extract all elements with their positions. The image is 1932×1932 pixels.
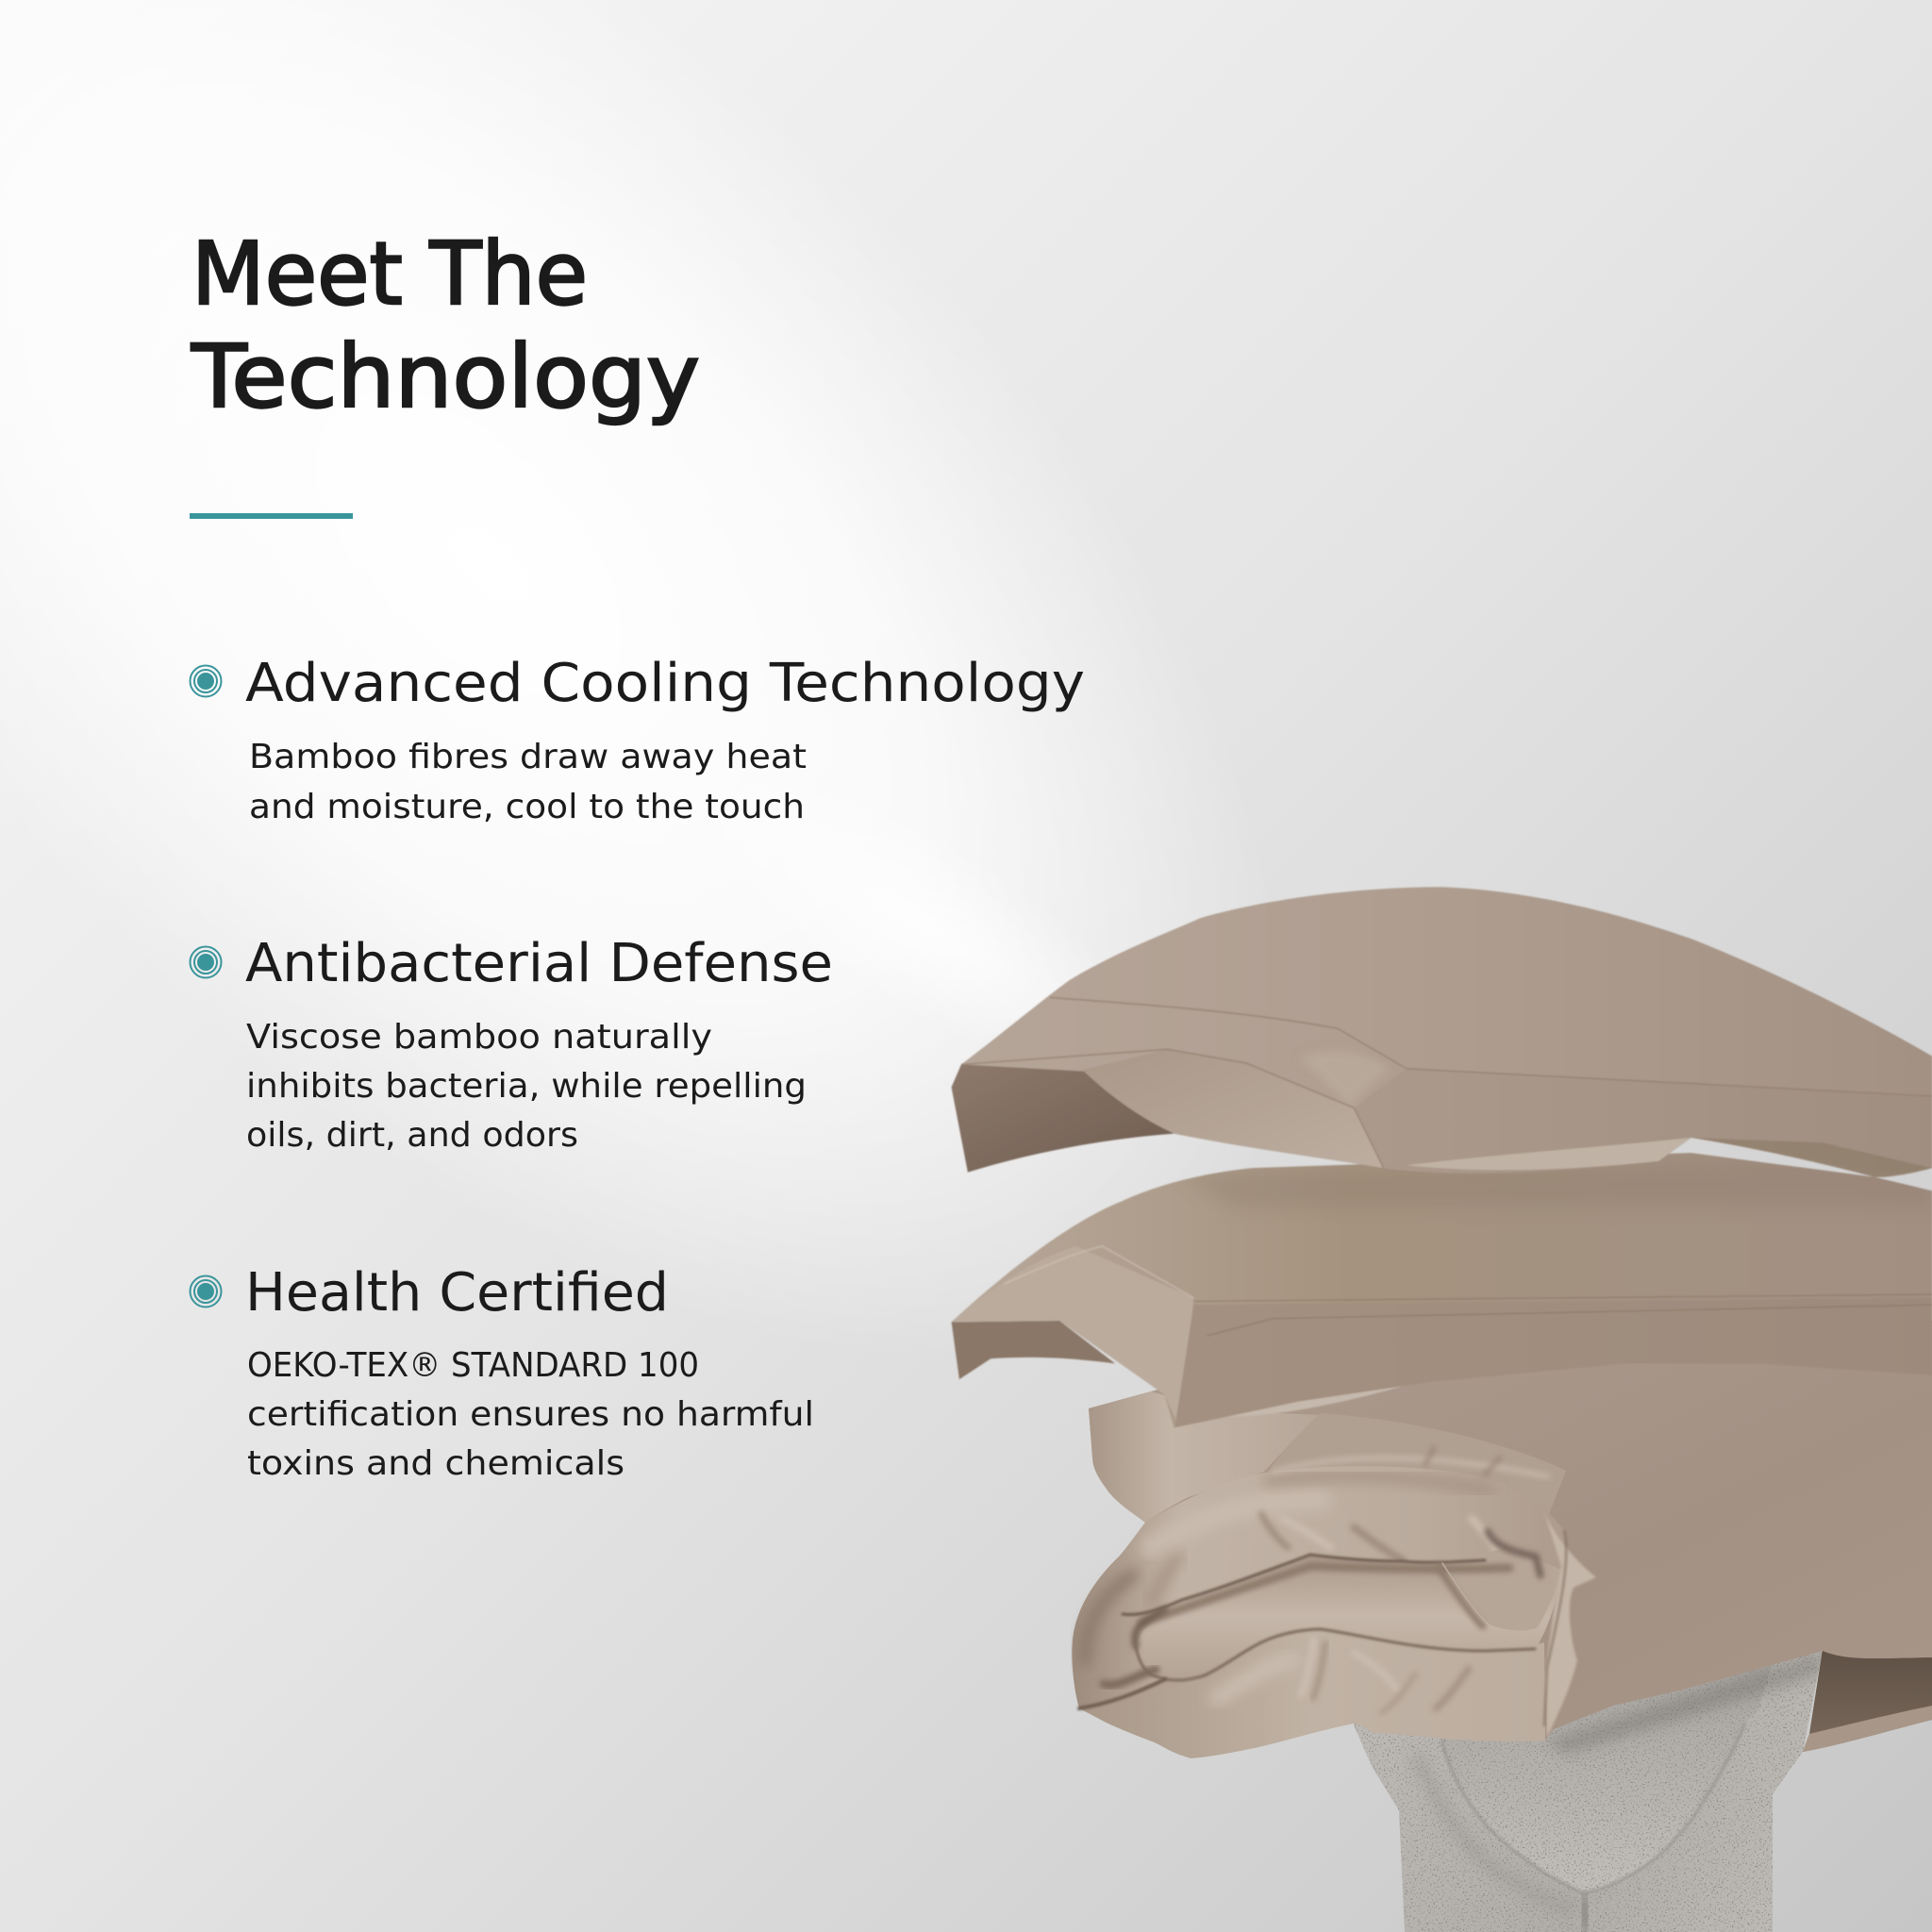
upper pillow inner lip: [1407, 1138, 1691, 1170]
feature: advanced cooling technology: [191, 653, 1085, 826]
icon: teal target bullet: [191, 1275, 221, 1307]
heading: Antibacterial Defense: [245, 933, 833, 994]
duvet ruffled edge: [1264, 1413, 1566, 1519]
description: [249, 738, 807, 826]
feature: health certified: [191, 1262, 814, 1483]
title: Technology: [191, 326, 700, 427]
description: Bamboo fibres draw away heat: [249, 738, 807, 776]
description: [246, 1018, 807, 1155]
accent rule: [190, 513, 353, 519]
description: Viscose bamboo naturally: [246, 1018, 712, 1057]
upper pillow front band: [1354, 1069, 1932, 1180]
upper pillow body: [952, 887, 1932, 1177]
stacked pillows: [945, 887, 1932, 1433]
upper pillow hem stitching: [961, 997, 1932, 1168]
description: inhibits bacteria, while repelling: [246, 1067, 807, 1106]
upper pillow pocket: [1082, 1049, 1387, 1174]
upper pillow shading details: [945, 1049, 1932, 1180]
bust speckle texture: [1349, 1651, 1830, 1932]
duvet roll soft shading: [1085, 1476, 1500, 1660]
neck shading: [1583, 1896, 1587, 1932]
fold highlight: [1313, 1057, 1381, 1098]
upper pillow dark inner flap: [945, 1064, 1175, 1174]
duvet upper roll: [1072, 1466, 1566, 1709]
title: [191, 224, 700, 427]
heading: Advanced Cooling Technology: [245, 653, 1085, 714]
heading: Health Certified: [245, 1262, 669, 1324]
description: toxins and chemicals: [247, 1444, 625, 1483]
stone bust: [1349, 1651, 1830, 1932]
description: OEKO-TEX® STANDARD 100: [247, 1346, 699, 1385]
bust jaw line: [1441, 1724, 1745, 1893]
icon: teal target bullet: [191, 947, 221, 977]
duvet pocket at right of middle fold: [1442, 1547, 1561, 1630]
upper pillow right dark wedge: [1691, 1138, 1932, 1179]
description: certification ensures no harmful: [247, 1395, 814, 1434]
title: Meet The: [192, 224, 588, 325]
upper pillow: [945, 887, 1932, 1180]
duvet dark underside: [1803, 1649, 1932, 1752]
duvet creases: [1079, 1448, 1547, 1712]
lower pillow: [945, 1153, 1932, 1433]
duvet back body: [1089, 1321, 1932, 1740]
feature: antibacterial defense: [191, 933, 833, 1155]
lower pillow underside: [952, 1321, 1115, 1379]
description: [247, 1346, 814, 1483]
description: and moisture, cool to the touch: [249, 788, 805, 826]
duvet bottom band: [1079, 1629, 1545, 1758]
product photo: bedding stacked on a stone bust: [945, 887, 1932, 1932]
duvet middle fold: [1136, 1556, 1561, 1679]
lower pillow flap shading: [945, 1153, 1932, 1433]
description: oils, dirt, and odors: [246, 1116, 578, 1155]
bust face plane: [1441, 1660, 1774, 1893]
lower pillow body: [952, 1153, 1932, 1427]
shadow under duvet: [1547, 1651, 1823, 1755]
folded duvet: [1072, 1321, 1932, 1758]
duvet side seam: [1543, 1509, 1596, 1738]
icon: teal target bullet: [191, 666, 221, 696]
lower pillow hem stitching: [1193, 1294, 1932, 1336]
duvet upper plate: [1089, 1391, 1321, 1523]
